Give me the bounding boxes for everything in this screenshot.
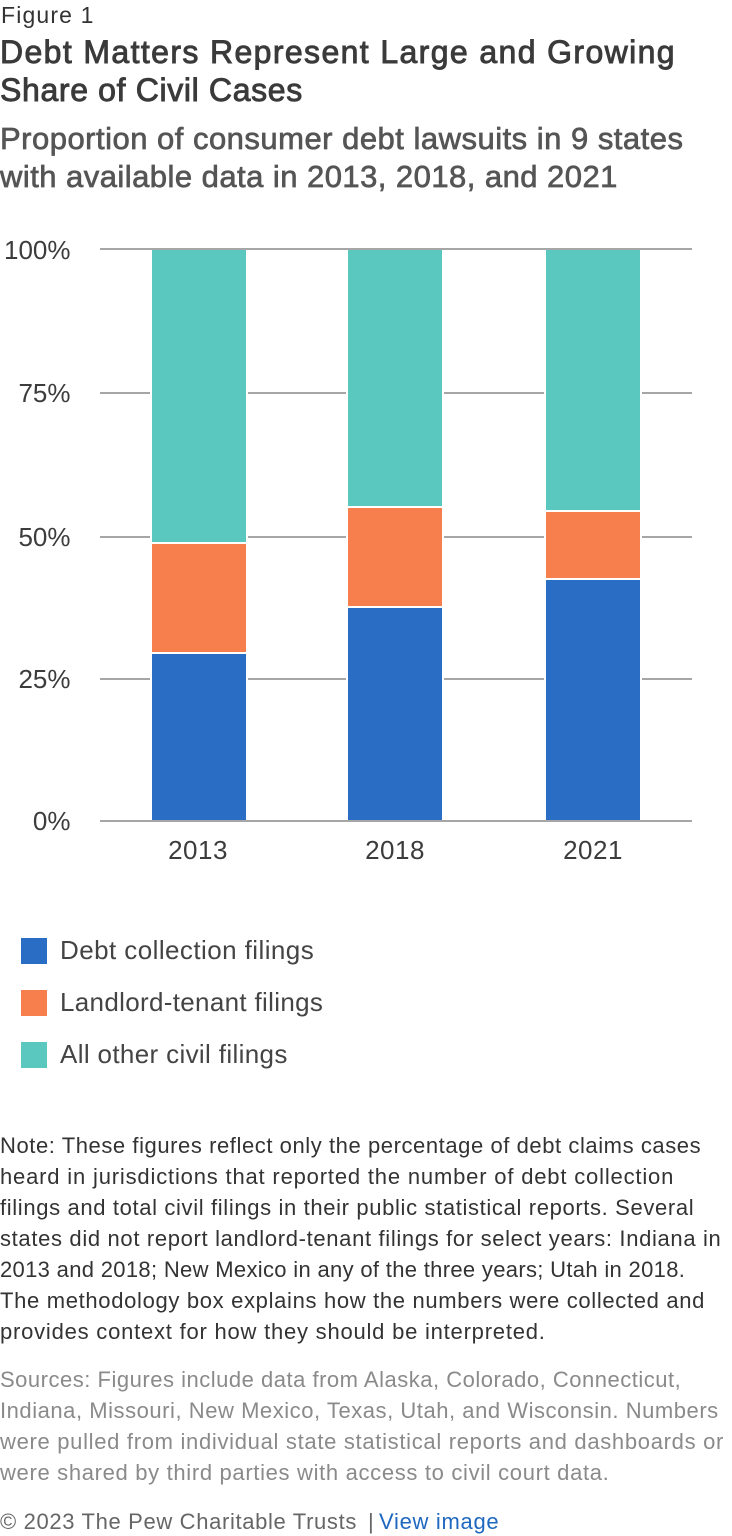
note: 2013 and 2018; New Mexico in any of the three years; Utah in 2018. <box>0 1257 685 1282</box>
copyright and link: © 2023 The Pew Charitable Trusts <box>0 1509 357 1534</box>
stacked bar chart <box>4 235 692 865</box>
y axis labels <box>4 235 70 836</box>
note: states did not report landlord-tenant filings for select years: Indiana in <box>0 1226 721 1251</box>
figure label: Figure 1 <box>1 2 95 28</box>
subtitle: with available data in 2013, 2018, and 2021 <box>0 159 618 194</box>
bar: 2018 <box>347 249 443 821</box>
note: provides context for how they should be interpreted. <box>0 1319 546 1344</box>
y axis labels: 100% <box>4 235 70 265</box>
note: Note: These figures reflect only the percentage of debt claims cases <box>0 1133 701 1158</box>
title: Share of Civil Cases <box>0 72 303 108</box>
sources: were pulled from individual state statistical reports and dashboards or <box>0 1429 724 1454</box>
sources: Sources: Figures include data from Alaska, Colorado, Connecticut, <box>0 1367 681 1392</box>
copyright and link: View image <box>379 1509 499 1534</box>
legend item: other civil: All other civil filings <box>60 1039 288 1069</box>
sources: were shared by third parties with access to civil court data. <box>0 1460 609 1485</box>
x axis labels: 2013 <box>168 835 228 865</box>
bar: 2013 <box>151 249 247 821</box>
subtitle: Proportion of consumer debt lawsuits in 9 states <box>0 121 683 156</box>
x axis labels: 2018 <box>365 835 425 865</box>
title <box>0 34 676 108</box>
note: filings and total civil filings in their public statistical reports. Several <box>0 1195 694 1220</box>
copyright and link: | <box>368 1509 374 1534</box>
note <box>0 1133 721 1344</box>
sources <box>0 1367 724 1485</box>
sources: Indiana, Missouri, New Mexico, Texas, Utah, and Wisconsin. Numbers <box>0 1398 719 1423</box>
legend item: debt collection: Debt collection filings <box>60 935 314 965</box>
bar: 2021 <box>545 249 641 821</box>
x axis labels <box>168 835 623 865</box>
legend item: landlord-tenant: Landlord-tenant filings <box>60 987 323 1017</box>
y axis labels: 75% <box>18 378 70 408</box>
note: heard in jurisdictions that reported the number of debt collection <box>0 1164 674 1189</box>
x axis labels: 2021 <box>563 835 623 865</box>
legend <box>21 935 323 1069</box>
y axis labels: 50% <box>18 522 70 552</box>
title: Debt Matters Represent Large and Growing <box>0 34 676 70</box>
y axis labels: 0% <box>33 806 70 836</box>
y axis labels: 25% <box>18 664 70 694</box>
subtitle <box>0 121 683 194</box>
note: The methodology box explains how the numbers were collected and <box>0 1288 705 1313</box>
